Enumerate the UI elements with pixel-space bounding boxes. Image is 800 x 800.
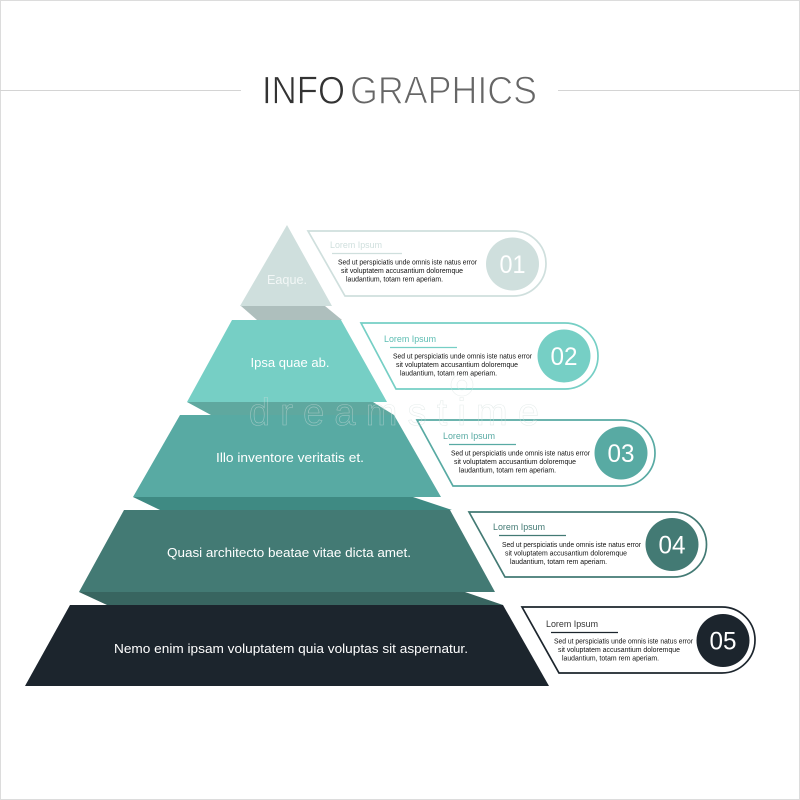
callout 05 — [522, 607, 755, 673]
pyramid — [25, 225, 549, 686]
tier 3: Illo inventore — [133, 415, 452, 510]
callout 04 — [469, 512, 706, 577]
callout 02: laudantium, totam rem aperiam. — [400, 370, 497, 378]
callout 01: 01 — [500, 251, 526, 279]
tier 5: Nemo enim: Nemo enim ipsam voluptatem quia voluptas sit aspernatur. — [114, 642, 468, 656]
tier 4: Quasi architecto: Quasi architecto beatae vitae dicta amet. — [167, 546, 411, 560]
watermark: dreamstime — [249, 392, 539, 434]
tier 2: Ipsa quae ab: Ipsa quae ab. — [250, 356, 330, 370]
callout 05: sit voluptatem accusantium doloremque — [558, 647, 680, 654]
callout 02 — [361, 323, 598, 389]
callout 05: Lorem Ipsum — [546, 619, 598, 630]
callout 02: sit voluptatem accusantium doloremque — [396, 362, 518, 369]
callout 01: Lorem Ipsum — [330, 240, 382, 251]
callout 01: laudantium, totam rem aperiam. — [346, 276, 443, 284]
callout 05: laudantium, totam rem aperiam. — [562, 656, 659, 662]
callout 02: 02 — [550, 343, 578, 371]
title: GRAPHICS — [350, 70, 537, 112]
tier 2: Ipsa quae ab — [187, 320, 394, 415]
callout 02: Lorem Ipsum — [384, 334, 436, 345]
tier 1: Eaque — [240, 225, 342, 320]
callout 05: 05 — [710, 628, 736, 656]
callout 04: sit voluptatem accusantium doloremque — [505, 550, 627, 558]
callout 03 — [417, 420, 655, 486]
tier 4: Quasi architecto — [79, 510, 503, 605]
title — [262, 70, 537, 112]
tier 1: Eaque: Eaque. — [267, 273, 307, 287]
callout 04: Lorem Ipsum — [493, 522, 545, 533]
callout 04: Sed ut perspiciatis unde omnis iste natus error — [502, 542, 642, 549]
tier 5: Nemo enim — [25, 605, 549, 686]
callout 03: Sed ut perspiciatis unde omnis iste natus error — [451, 450, 591, 458]
callout 01: sit voluptatem accusantium doloremque — [341, 268, 463, 275]
tier 3: Illo inventore: Illo inventore veritatis et. — [216, 451, 364, 465]
callout 05: Sed ut perspiciatis unde omnis iste natus error — [554, 638, 694, 646]
callout 01 — [308, 231, 546, 296]
callout 03: sit voluptatem accusantium doloremque — [454, 459, 576, 466]
title: INFO — [262, 70, 345, 112]
callout 03: laudantium, totam rem aperiam. — [459, 468, 556, 474]
callout 01: Sed ut perspiciatis unde omnis iste natus error — [338, 260, 478, 266]
callout 03: 03 — [608, 440, 634, 468]
callout 02: Sed ut perspiciatis unde omnis iste natus error — [393, 354, 533, 360]
callout 03: Lorem Ipsum — [443, 431, 495, 442]
callout 04: laudantium, totam rem aperiam. — [510, 559, 607, 566]
callout 04: 04 — [658, 532, 686, 560]
